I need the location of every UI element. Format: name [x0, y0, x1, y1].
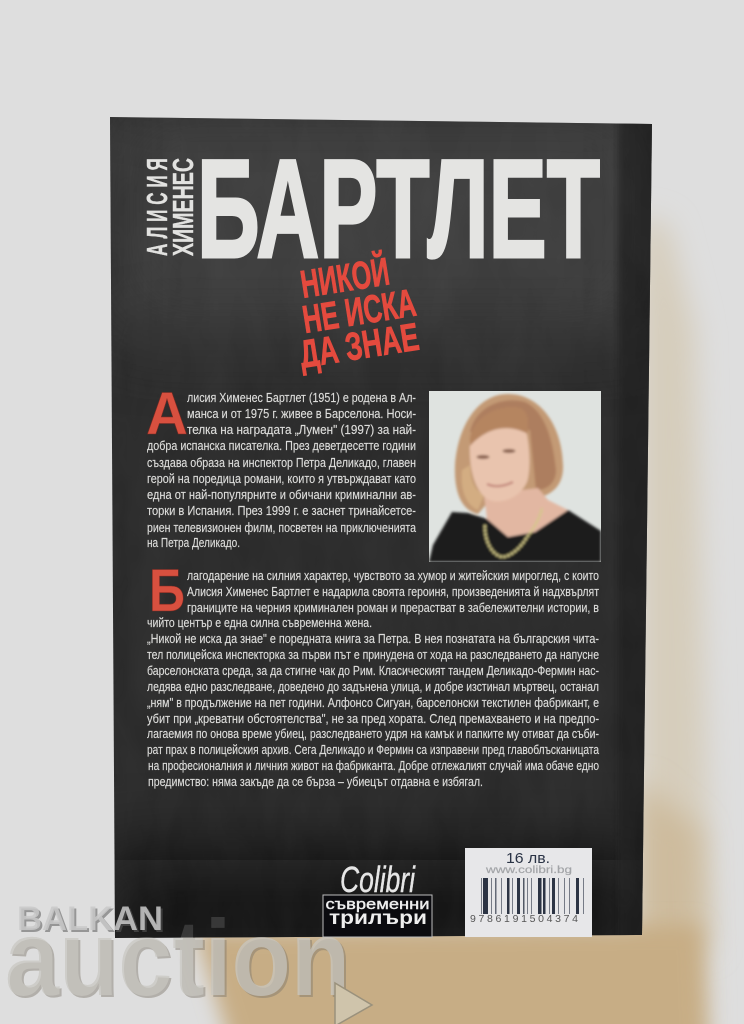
- text block: book description: предимство: няма закъде да се бърза – убиецът отдавна е избягал.: [148, 775, 483, 789]
- text block: book description: рат прах в полицейския архив. Сега Деликадо и Фермин са изправени пред главоблъсканицата: [147, 743, 599, 757]
- watermark word auction: auction: [7, 899, 352, 1020]
- text block: book description: „Никой не иска да знае" е поредната книга за Петра. В нея познатата на българския чита-: [147, 632, 599, 646]
- black top: [429, 510, 601, 562]
- text block: book description: убит при „креватни обстоятелства", не за пред хората. След премахването и на предпо-: [147, 712, 599, 726]
- barcode digits: 9786191504374: [470, 913, 578, 925]
- text block: author biography: риен телевизионен филм, посветен на приключенията: [147, 521, 416, 535]
- text block: book description: „ням" в продължение на пет години. Алфонсо Сигуан, барселонски текстилен фабрикант, е: [147, 696, 599, 710]
- author name vertical: ХИМЕНЕС: [168, 158, 200, 256]
- text block: book description: лагаемия по онова време убиец, разследването удря на камък и папките му отиват да съби-: [147, 727, 599, 741]
- logo: series label: съвременни: [326, 896, 430, 913]
- text block: author biography: лисия Хименес Бартлет (1951) е родена в Ал-: [187, 391, 416, 405]
- text block: book description: [147, 557, 599, 789]
- website: www.colibri.bg: [485, 864, 572, 876]
- watermark word auction: [8, 917, 346, 998]
- face: [470, 425, 529, 501]
- author name vertical: [142, 153, 200, 256]
- text block: author biography: една от най-популярните и обичани криминални ав-: [147, 488, 416, 502]
- drop cap A: А: [146, 380, 188, 447]
- text block: author biography: манса и от 1975 г. живее в Барселона. Носи-: [187, 407, 416, 421]
- text block: author biography: телка на наградата „Лумен" (1997) за най-: [187, 423, 416, 437]
- watermark: Balkan auction: [5, 897, 372, 1024]
- drop cap B: Б: [149, 557, 185, 624]
- text block: book description: на професионалния и личния живот на фабриканта. Добре отлежалият случай има обаче едно: [148, 759, 599, 773]
- text block: author biography: герой на поредица романи, които я утвърждават като: [147, 472, 416, 486]
- text block: author biography: [146, 380, 416, 550]
- watermark word BALKAN: BALKAN: [17, 900, 163, 938]
- watermark word auction: auction: [5, 897, 350, 1018]
- text block: book description: границите на черния криминален роман и прерастват в забележителни истории, в: [187, 601, 599, 615]
- watermark word auction: auction: [5, 897, 350, 1018]
- text block: book description: Алисия Хименес Бартлет е надарила своята героиня, произведенията й надхвърлят: [187, 585, 599, 599]
- price: 16 лв.: [506, 850, 550, 867]
- neck and chest: [484, 488, 568, 537]
- hair: [455, 394, 563, 514]
- mouth: [487, 482, 513, 486]
- heading: book title in red: НЕ ИСКА: [300, 282, 419, 342]
- text block: author biography: на Петра Деликадо.: [147, 536, 240, 550]
- logo: series label: [323, 895, 432, 937]
- text block: book description: ледява едно разследване, доведено до задънена улица, и добре изстинал мъртвец, останал: [147, 680, 599, 694]
- text block: book description: барселонската среда, за да стигне чак до Рим. Класическият тандем Деликадо-Фермин нас-: [147, 664, 599, 678]
- heading: book title in red: ДА ЗНАЕ: [297, 316, 422, 377]
- heading: book title in red: НИКОЙ: [297, 249, 392, 307]
- watermark word BALKAN: BALKAN: [19, 902, 165, 940]
- text block: book description: тел полицейска инспекторка за първи път е принудена от хода на разследването да напусне: [147, 648, 599, 662]
- text block: book description: лагодарение на силния характер, чувството за хумор и житейския мироглед, с които: [187, 569, 599, 583]
- heading: book title in red: [286, 245, 424, 377]
- author name vertical: АЛИСИЯ: [142, 153, 173, 256]
- logo: series label: трилъри: [329, 908, 427, 929]
- text block: author biography: добра испанска писателка. През деветдесетте години: [147, 439, 416, 453]
- eyes: [476, 455, 490, 459]
- panel: book back cover: [110, 117, 652, 938]
- barcode bars: [481, 878, 584, 914]
- fringe: [468, 424, 528, 446]
- barcode sticker: [465, 848, 592, 937]
- photo: author portrait: [429, 391, 601, 562]
- necklace: [485, 508, 542, 557]
- logo: Colibri publisher: Colibri: [340, 859, 416, 900]
- watermark arrow: [335, 983, 372, 1024]
- text block: author biography: създава образа на инспектор Петра Деликадо, главен: [147, 456, 416, 470]
- text block: book description: чийто център е една силна съвременна жена.: [147, 616, 372, 630]
- text block: author biography: торки в Испания. През 1999 г. е заснет тринайсетсе-: [147, 504, 416, 518]
